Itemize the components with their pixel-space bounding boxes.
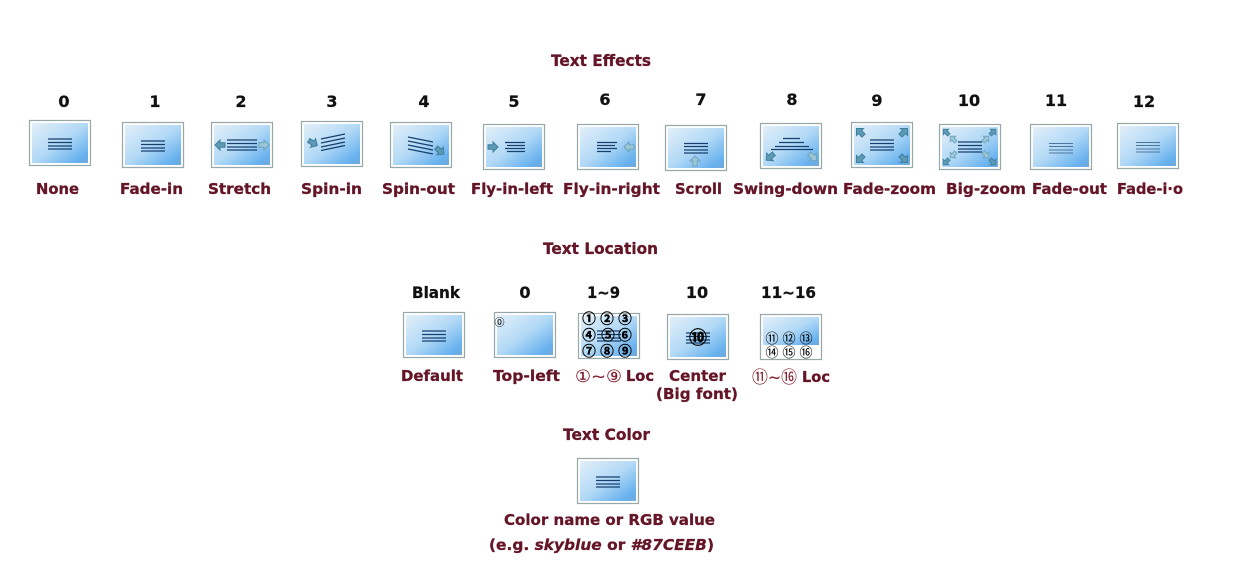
effect 0: None: 0 bbox=[58, 92, 70, 111]
location 0: Top-left: ⓪ bbox=[494, 314, 504, 329]
location 1 to 9: ⑦ bbox=[582, 340, 596, 360]
effect 0: None bbox=[30, 92, 90, 198]
effect 12: Fade-i·o: 12 bbox=[1133, 92, 1155, 111]
effect 9: Fade-zoom bbox=[843, 91, 936, 198]
color description: Color name or RGB value bbox=[504, 511, 715, 529]
location 1 to 9 bbox=[575, 283, 654, 387]
effect 10: Big-zoom bbox=[940, 91, 1026, 198]
location 0: Top-left: 0 bbox=[519, 283, 531, 302]
effect 11: Fade-out: Fade-out bbox=[1032, 180, 1108, 198]
location 0: Top-left bbox=[493, 283, 561, 385]
location 1 to 9: ①~⑨ bbox=[575, 367, 622, 387]
effect 11: Fade-out: 11 bbox=[1045, 91, 1067, 110]
effect 1: Fade-in: Fade-in bbox=[120, 180, 183, 198]
effect 12: Fade-i·o: Fade-i·o bbox=[1117, 180, 1183, 198]
location 11 to 16: 11~16 bbox=[761, 283, 816, 302]
location 10: Center big font: (Big font) bbox=[656, 385, 738, 403]
location 11 to 16: ⑭ bbox=[765, 342, 779, 361]
location: Blank / Default: Default bbox=[401, 367, 464, 385]
effect 9: Fade-zoom: Fade-zoom bbox=[843, 180, 936, 198]
location 1 to 9: ⑧ bbox=[600, 340, 614, 360]
effect 2: Stretch: 2 bbox=[235, 92, 247, 111]
location 11 to 16 bbox=[752, 283, 830, 388]
effect 0: None: None bbox=[36, 180, 79, 198]
location 1 to 9: ② bbox=[600, 308, 614, 328]
effect 1: Fade-in bbox=[120, 92, 184, 198]
effect 6: Fly-in-right bbox=[563, 90, 661, 198]
location 11 to 16: ⑪~⑯ bbox=[752, 368, 797, 388]
effect 2: Stretch: Stretch bbox=[208, 180, 271, 198]
effect 7: Scroll: Scroll bbox=[675, 180, 722, 198]
effect 2: Stretch bbox=[208, 92, 272, 198]
location 1 to 9: 1~9 bbox=[587, 283, 620, 302]
effect 7: Scroll bbox=[666, 90, 726, 198]
effect 12: Fade-i·o bbox=[1117, 92, 1183, 198]
effect 3: Spin-in: 3 bbox=[326, 92, 338, 111]
effect 8: Swing-down: 8 bbox=[786, 90, 798, 109]
location 10: Center big font: 10 bbox=[686, 283, 708, 302]
location 11 to 16: ⑮ bbox=[782, 342, 796, 361]
effect 11: Fade-out bbox=[1030, 91, 1108, 198]
effect 4: Spin-out bbox=[382, 92, 456, 198]
effect 7: Scroll: 7 bbox=[695, 90, 707, 109]
location 1 to 9: Loc bbox=[626, 367, 654, 385]
effect 6: Fly-in-right: Fly-in-right bbox=[563, 180, 661, 198]
location 11 to 16: ⑯ bbox=[799, 342, 813, 361]
effect 3: Spin-in bbox=[301, 92, 362, 198]
location 11 to 16: ⑬ bbox=[799, 328, 813, 347]
location: Blank / Default bbox=[401, 283, 464, 385]
color description: (e.g. skyblue or #87CEEB) bbox=[489, 536, 714, 554]
effect 10: Big-zoom: 10 bbox=[958, 91, 980, 110]
location 1 to 9: ⑤ bbox=[601, 324, 615, 344]
effect 10: Big-zoom: Big-zoom bbox=[946, 180, 1026, 198]
effect 1: Fade-in: 1 bbox=[149, 92, 161, 111]
location 1 to 9: ④ bbox=[582, 324, 596, 344]
location 10: Center big font bbox=[656, 283, 738, 403]
color thumbnail bbox=[578, 458, 638, 504]
heading: Text Location: Text Location bbox=[543, 239, 658, 258]
effect 5: Fly-in-left: Fly-in-left bbox=[471, 180, 554, 198]
heading: Text Color: Text Color bbox=[563, 425, 650, 444]
location 1 to 9: ⑨ bbox=[618, 340, 632, 360]
effect 5: Fly-in-left bbox=[471, 92, 554, 198]
effect 8: Swing-down: Swing-down bbox=[733, 180, 838, 198]
color description bbox=[489, 511, 715, 554]
effect 6: Fly-in-right: 6 bbox=[599, 90, 611, 109]
location 11 to 16: ⑫ bbox=[782, 328, 796, 347]
location 0: Top-left: Top-left bbox=[493, 367, 561, 385]
heading: Text Effects: Text Effects bbox=[551, 51, 651, 70]
location 11 to 16: ⑪ bbox=[765, 328, 779, 347]
effect 4: Spin-out: 4 bbox=[418, 92, 430, 111]
location: Blank / Default: Blank bbox=[412, 283, 460, 302]
location 11 to 16: Loc bbox=[802, 368, 830, 386]
location 1 to 9: ⑥ bbox=[618, 324, 632, 344]
effect 8: Swing-down bbox=[733, 90, 838, 198]
effect 4: Spin-out: Spin-out bbox=[382, 180, 456, 198]
effect 3: Spin-in: Spin-in bbox=[301, 180, 362, 198]
effect 9: Fade-zoom: 9 bbox=[871, 91, 883, 110]
location 10: Center big font: ⑩ bbox=[689, 324, 707, 350]
location 10: Center big font: Center bbox=[669, 367, 726, 385]
effect 5: Fly-in-left: 5 bbox=[508, 92, 520, 111]
location 1 to 9: ③ bbox=[618, 308, 632, 328]
location 1 to 9: ① bbox=[582, 308, 596, 328]
